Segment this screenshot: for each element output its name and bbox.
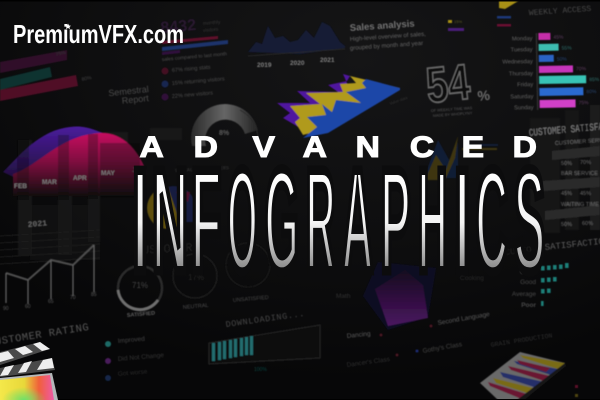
weekly access bar chart: Monday	[512, 36, 533, 42]
title: INFOGRAPHICS: F	[191, 140, 221, 303]
stats block: monthly	[203, 19, 221, 27]
radar chart	[336, 262, 491, 369]
legend: Improved	[118, 336, 146, 345]
stats block: 15% returning visitors	[172, 76, 225, 87]
customer satisfaction donuts: UNSATISFIED	[233, 295, 269, 304]
subtitle: ADVANCED: ADVANCED	[140, 130, 537, 164]
customer satisfaction donuts	[118, 241, 270, 319]
weekly access bar chart: 55%	[562, 45, 572, 52]
mini chart behind title right	[424, 136, 498, 180]
weekly access bar chart: Thursday	[509, 71, 533, 78]
title: INFOGRAPHICS: P	[380, 138, 410, 302]
line chart: 65	[48, 299, 54, 305]
mountain chart: 2019	[257, 62, 272, 69]
3D wave chart	[277, 74, 409, 138]
customer satisfaction table: 60%	[582, 221, 593, 227]
weekly access bar chart: Saturday	[510, 94, 534, 101]
title: INFOGRAPHICS: S	[514, 139, 545, 302]
weekly access bar chart: 45%	[553, 35, 564, 41]
line chart	[0, 219, 100, 312]
line chart: 2021	[27, 219, 48, 230]
mini legend	[448, 0, 520, 31]
text: semestral report: Report	[121, 93, 150, 106]
customer satisfaction table: 50%	[561, 161, 572, 167]
satisfaction rating dots: CUSTO	[504, 245, 532, 258]
stream chart: MAR	[42, 179, 57, 186]
stats block: visitors	[203, 27, 219, 34]
3D wave chart: Value data	[389, 95, 409, 106]
weekly access bar chart: 70%	[576, 66, 587, 72]
line chart: 85	[91, 292, 97, 298]
title: INFOGRAPHICS: R	[306, 139, 335, 302]
customer satisfaction table: 45%	[561, 191, 572, 197]
radar chart: Cooking	[460, 275, 484, 282]
weekly access bar chart: Tuesday	[511, 47, 533, 54]
radar chart: Math	[336, 293, 351, 300]
stacked table card: GRAIN PRODUCTION	[490, 332, 553, 349]
radar chart: Dancer's Class	[346, 356, 391, 369]
stats block: 67% rising stats	[172, 65, 211, 74]
gauge	[175, 104, 258, 174]
customer satisfaction donuts: 17%	[188, 273, 204, 282]
title: INFOGRAPHICS: N	[152, 140, 188, 303]
satisfaction rating dots: Great	[520, 269, 536, 276]
weekly access bar chart: 85%	[589, 77, 600, 83]
title: INFOGRAPHICS: A	[342, 138, 373, 302]
customer satisfaction table	[528, 105, 600, 233]
mountain chart: 2020	[290, 60, 305, 67]
pie chart behind title	[147, 186, 195, 229]
stream chart: JUN	[132, 167, 145, 174]
customer satisfaction table: 45%	[580, 191, 591, 197]
mountain chart	[248, 22, 345, 69]
customer satisfaction table: WAITING TIME	[561, 202, 599, 208]
customer satisfaction table: 70%	[580, 160, 591, 166]
radar chart: Gothy's Class	[422, 341, 463, 355]
radar chart: Dancing	[346, 330, 371, 340]
stats block	[160, 17, 228, 101]
mountain chart: 2021	[320, 57, 335, 64]
big 54 percent	[423, 53, 491, 118]
legend: Got worse	[118, 368, 148, 378]
customer satisfaction table: 50%	[561, 222, 572, 228]
stats block: sales compared to last month	[162, 51, 227, 63]
downloading progress	[209, 309, 320, 373]
stream chart: MAY	[101, 170, 116, 177]
weekly access bar chart: Wednesday	[502, 59, 533, 66]
line chart: 90	[3, 306, 9, 312]
line chart: 60	[25, 304, 31, 310]
big 54 percent: MADE BY WHOPLYNY	[433, 111, 473, 118]
big 54 percent: %	[477, 87, 491, 104]
stats block: 8432	[160, 17, 197, 37]
customer satisfaction donuts: NEUTRAL	[183, 303, 209, 311]
satisfaction rating dots	[504, 236, 600, 309]
satisfaction rating dots: Good	[520, 279, 536, 286]
customer satisfaction table: BAR SERVICE	[561, 171, 598, 177]
stats block: 22% new visitors	[172, 90, 214, 100]
horizontal bars top left: 75%	[55, 50, 67, 58]
title: INFOGRAPHICS: O	[227, 138, 258, 302]
title: INFOGRAPHICS: I	[454, 139, 471, 302]
mini legend: 15%	[454, 19, 462, 24]
weekly access bar chart: 75%	[579, 100, 589, 106]
weekly access bar chart: 80%	[586, 89, 597, 95]
stream chart: APR	[73, 175, 87, 182]
gauge: SOCIAL MEDIA USERS	[175, 165, 229, 174]
text: semestral report	[108, 84, 150, 106]
legend	[105, 336, 165, 381]
horizontal bars top left: 80%	[81, 75, 93, 83]
stream chart	[3, 127, 146, 200]
title: INFOGRAPHICS: I	[132, 139, 149, 302]
title: INFOGRAPHICS: G	[265, 138, 299, 302]
logo: PremiumVFX.com: PremiumVFX.com	[13, 19, 184, 49]
legend: Did Not Change	[118, 352, 165, 363]
weekly access bar chart: WEEKLY ACCESS	[529, 5, 592, 18]
big 54 percent: 54	[423, 53, 473, 114]
icon: Final Cut Pro clapboard	[0, 342, 58, 400]
customer satisfaction donuts: 71%	[132, 281, 148, 290]
downloading progress: DOWNLOADING...	[225, 309, 305, 330]
line chart: 70	[70, 295, 76, 301]
radar chart: Second Language	[437, 311, 491, 327]
gauge: 8%	[219, 130, 230, 137]
satisfaction rating dots: Poor	[521, 302, 536, 309]
text: sales analysis: High-level overview of sales,	[350, 32, 426, 43]
ghost letters left	[18, 128, 182, 260]
weekly access bar chart	[501, 5, 600, 112]
weekly access bar chart: 50%	[557, 57, 567, 63]
text: sales analysis: grouped by month and year	[350, 41, 423, 52]
text: sales analysis	[349, 18, 426, 52]
weekly access bar chart: Sunday	[514, 105, 534, 111]
weekly access bar chart: Friday	[517, 82, 533, 88]
customer satisfaction donuts: SATISFIED	[127, 311, 155, 319]
customer satisfaction donuts: CUSTOMER	[134, 241, 193, 258]
stream chart: FEB	[14, 183, 27, 190]
stacked table card	[480, 332, 578, 400]
satisfaction rating dots: Average	[512, 291, 536, 298]
downloading progress: 100%	[254, 367, 267, 373]
title: INFOGRAPHICS: C	[476, 138, 508, 302]
text: semestral report: Semestral	[108, 84, 149, 98]
big 54 percent: OF WEEKLY TIME WAS	[431, 106, 473, 113]
title: INFOGRAPHICS	[132, 138, 545, 303]
horizontal bars top left	[0, 50, 93, 101]
text: sales analysis: Sales analysis	[349, 18, 415, 34]
title: INFOGRAPHICS: H	[418, 139, 447, 302]
